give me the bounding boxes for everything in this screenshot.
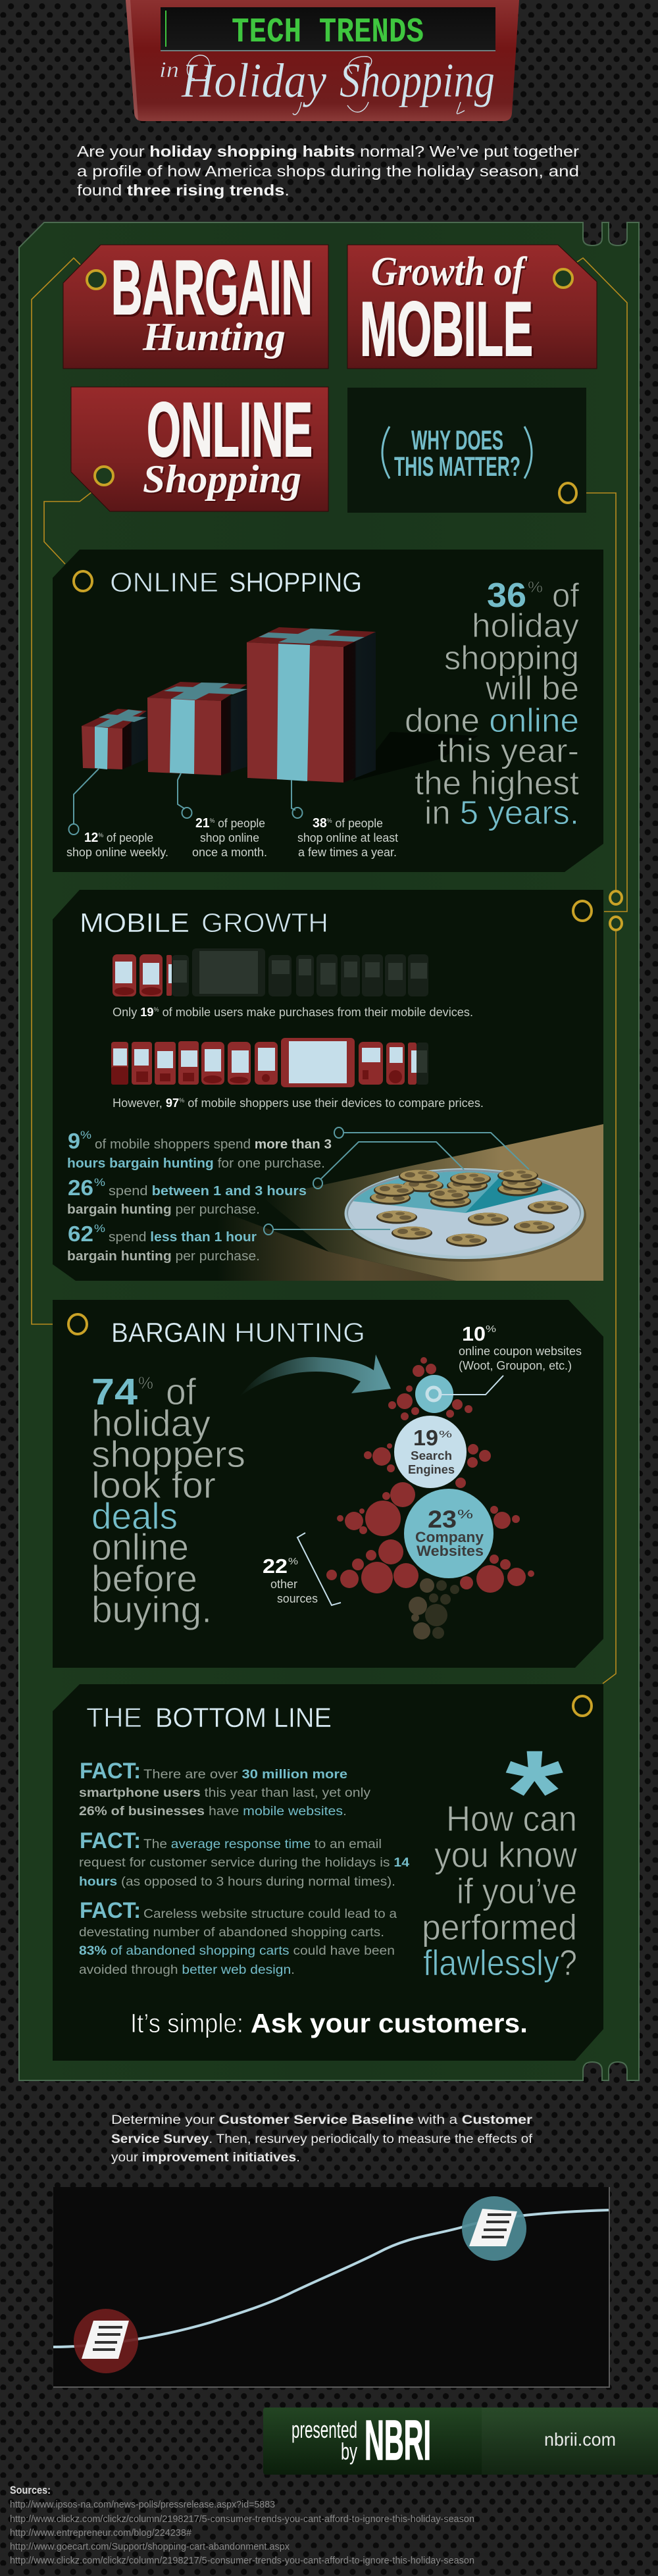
big stat: 74 percent: look for	[91, 1464, 216, 1507]
panel: mobile growth	[53, 890, 603, 1281]
big stat: 36 percent: in 5 years.	[424, 794, 579, 831]
panel: the bottom line	[53, 1684, 603, 2061]
survey paragraph	[111, 2113, 533, 2165]
intro paragraph: found three rising trends .	[77, 182, 290, 199]
presented by banner: nbrii.com	[544, 2429, 616, 2450]
caption: 21 percent: %	[210, 817, 215, 824]
caption: 21 percent	[192, 816, 267, 859]
ring	[68, 1314, 87, 1334]
heading	[111, 1317, 365, 1348]
heading: ONLINE	[110, 567, 218, 598]
icon: baseline survey	[74, 2309, 138, 2373]
closing line: It’s simple:	[130, 2008, 243, 2038]
fact 3	[79, 1898, 397, 1977]
stat: 62 percent: %	[94, 1222, 105, 1235]
fact 3: avoided through better web design .	[79, 1963, 295, 1977]
chart: improvement curve	[53, 2187, 609, 2387]
presented by banner: by	[341, 2438, 357, 2465]
closing line	[130, 2008, 528, 2038]
intro paragraph	[77, 143, 579, 199]
illustration: cookie plate on table	[217, 1124, 603, 1281]
fact 2: FACT:	[80, 1828, 141, 1853]
bubble: 23 percent	[404, 1489, 494, 1578]
fact 2: The average response time to an email	[143, 1838, 382, 1851]
script title: Shopping	[340, 54, 495, 108]
heading: BOTTOM LINE	[155, 1702, 332, 1733]
heading: GROWTH	[201, 908, 328, 938]
fact 3: devestating number of abandoned shopping carts.	[79, 1926, 384, 1940]
question: flawlessly?	[423, 1942, 577, 1983]
label: 22 percent: sources	[277, 1592, 318, 1605]
icon: follow-up survey	[462, 2196, 526, 2261]
caption: 38 percent: of people	[332, 817, 383, 830]
fact 1	[79, 1759, 371, 1818]
caption: 12 percent: %	[98, 832, 103, 838]
label: 22 percent: %	[288, 1556, 298, 1567]
panel: bargain hunting	[53, 1300, 603, 1668]
heading: MOBILE	[80, 908, 190, 938]
label: 10 percent	[459, 1322, 582, 1372]
stat: 9 percent: hours bargain hunting for one purchase.	[67, 1156, 325, 1171]
bubble: 19 percent: Engines	[408, 1463, 455, 1476]
tag: growth of mobile: Growth of	[371, 249, 528, 294]
label: 22 percent: 22	[263, 1555, 288, 1578]
label: 10 percent: 10	[462, 1322, 486, 1345]
bubble: 23 percent: %	[457, 1508, 473, 1521]
heading: HUNTING	[234, 1317, 365, 1348]
stat: 62 percent: bargain hunting per purchase.	[67, 1249, 260, 1264]
big stat: 36 percent: %	[528, 579, 543, 596]
big stat: 36 percent: done online	[405, 702, 579, 739]
heading: THE	[86, 1702, 142, 1733]
fact 2: hours (as opposed to 3 hours during normal times).	[79, 1875, 395, 1889]
label: 22 percent: other	[270, 1578, 297, 1591]
panel: why does this matter: WHY DOES	[411, 425, 503, 455]
panel: online shopping	[53, 550, 603, 872]
big stat: 36 percent: of	[552, 577, 580, 614]
stat: 9 percent: of mobile shoppers spend more than 3	[95, 1137, 332, 1152]
caption: 12 percent: of people	[103, 831, 153, 844]
stat: 26 percent: spend between 1 and 3 hours	[109, 1184, 307, 1198]
heading	[110, 567, 362, 598]
sources: http://www.ipsos-na.com/news-polls/pressrelease.aspx?id=5883	[10, 2499, 275, 2510]
big stat: 36 percent: shopping	[444, 639, 579, 677]
fact 3: Careless website structure could lead to a	[143, 1907, 397, 1921]
tree: trunk	[409, 1578, 459, 1639]
question	[422, 1798, 577, 1983]
stat: 26 percent: 26	[68, 1175, 93, 1200]
caption: 12 percent: 12	[84, 831, 98, 845]
sources: http://www.entrepreneur.com/blog/224238#	[10, 2527, 192, 2538]
panel: why does this matter: THIS MATTER?	[394, 451, 520, 482]
question: How can	[446, 1798, 577, 1839]
bubble: 23 percent: Company	[415, 1529, 484, 1545]
caption: 12 percent	[66, 831, 168, 859]
stat: 9 percent: 9	[68, 1129, 80, 1153]
tree: red ornaments	[326, 1357, 534, 1593]
gift: small	[82, 709, 147, 769]
stat: 62 percent: spend less than 1 hour	[109, 1230, 257, 1245]
stat: 62 percent	[67, 1222, 260, 1264]
arrow	[240, 1354, 391, 1397]
label: 10 percent: %	[486, 1324, 496, 1335]
label: 22 percent	[263, 1533, 341, 1605]
script title: in	[159, 58, 179, 82]
heading: SHOPPING	[229, 567, 362, 598]
caption: 38 percent: a few times a year.	[298, 846, 397, 859]
header banner	[126, 0, 519, 121]
caption: 21 percent: shop online	[200, 831, 259, 844]
tag: online shopping	[71, 386, 328, 511]
fact 2	[79, 1828, 409, 1889]
sources: http://www.clickz.com/clickz/column/2198217/5-consumer-trends-you-cant-afford-to-ignore-this-holiday-season	[10, 2513, 474, 2525]
bubble: 23 percent: 23	[428, 1506, 457, 1533]
floor shadow	[353, 732, 478, 781]
tag: online shopping: ONLINE	[147, 386, 313, 473]
question: you know	[434, 1834, 577, 1875]
big stat: 74 percent: before	[91, 1558, 197, 1600]
connector lines	[68, 769, 303, 835]
big stat: 36 percent: 36	[487, 577, 526, 615]
tag: growth of mobile	[347, 245, 597, 372]
big stat: 36 percent: will be	[485, 669, 579, 707]
big stat: 74 percent: 74	[91, 1371, 138, 1413]
sources	[10, 2484, 474, 2566]
bubble: 19 percent: Search	[411, 1449, 452, 1462]
label: 10 percent: online coupon websites	[459, 1345, 582, 1358]
sources: http://www.clickz.com/clickz/column/2198217/5-consumer-trends-you-cant-afford-to-ignore-this-holiday-season	[10, 2555, 474, 2566]
survey paragraph: Determine your Customer Service Baseline with a Customer	[111, 2113, 533, 2127]
bubble: 19 percent: %	[439, 1429, 452, 1440]
big stat: 74 percent: shoppers	[91, 1433, 245, 1476]
gift: large	[247, 627, 376, 783]
LCD display	[161, 7, 495, 52]
caption: 21 percent: of people	[215, 817, 265, 830]
bubble: 19 percent	[394, 1416, 467, 1488]
caption: 19 percent: of mobile users make purchases from their mobile devices.	[159, 1006, 473, 1019]
big stat: 74 percent	[91, 1371, 245, 1631]
caption: 21 percent: 21	[195, 816, 210, 831]
intro paragraph: Are your holiday shopping habits normal? We’ve put together	[77, 143, 579, 160]
sources: http://www.goecart.com/Support/shopping-cart-abandonment.aspx	[10, 2541, 290, 2552]
survey paragraph: your improvement initiatives .	[111, 2151, 300, 2165]
caption: 19 percent: Only 19	[113, 1006, 153, 1019]
heading	[80, 908, 328, 938]
tag: bargain hunting: Hunting	[142, 315, 286, 359]
presented by banner	[263, 2408, 658, 2475]
big stat: 74 percent: buying.	[91, 1589, 212, 1631]
ring	[74, 571, 92, 591]
script title	[159, 54, 495, 115]
intro paragraph: a profile of how America shops during the holiday season, and	[77, 163, 579, 180]
gold circuit traces	[32, 258, 627, 1684]
tag: growth of mobile: MOBILE	[360, 286, 533, 372]
circuit board background	[19, 222, 639, 2080]
closing line: Ask your customers.	[251, 2008, 528, 2038]
presented by banner: presented	[291, 2416, 357, 2443]
presented by banner: NBRI	[365, 2409, 431, 2472]
caption: 97 percent: of mobile shoppers use their devices to compare prices.	[184, 1096, 484, 1110]
survey paragraph: Service Survey . Then, resurvey periodically to measure the effects of	[111, 2132, 533, 2146]
fact 3: FACT:	[80, 1898, 141, 1923]
stat: 26 percent: bargain hunting per purchase.	[67, 1202, 260, 1217]
fact 1: smartphone users this year than last, yet only	[79, 1786, 371, 1800]
fact 1: FACT:	[80, 1759, 141, 1784]
stat: 26 percent: %	[94, 1176, 105, 1189]
stat: 9 percent: %	[80, 1129, 91, 1141]
big stat: 74 percent: deals	[91, 1495, 178, 1537]
tag: bargain hunting: BARGAIN	[111, 244, 313, 330]
ring	[573, 901, 592, 921]
asterisk: *	[505, 1725, 563, 1859]
big stat: 74 percent: of	[166, 1371, 196, 1413]
caption: 38 percent	[297, 816, 398, 859]
heading: BARGAIN	[111, 1317, 226, 1348]
big stat: 36 percent: this year-	[438, 732, 579, 769]
big stat: 74 percent: %	[138, 1373, 153, 1393]
label: 10 percent: (Woot, Groupon, etc.)	[459, 1359, 572, 1372]
LCD display: TECH TRENDS	[232, 13, 424, 52]
callout leader lines	[264, 1127, 529, 1235]
fact 1: There are over 30 million more	[143, 1768, 347, 1782]
big stat: 36 percent	[405, 577, 580, 831]
big stat: 36 percent: the highest	[415, 764, 579, 802]
bubble: 10 percent	[415, 1375, 503, 1413]
stat: 62 percent: 62	[68, 1222, 93, 1246]
question: if you’ve	[457, 1870, 577, 1911]
big stat: 74 percent: holiday	[91, 1403, 211, 1445]
stat: 9 percent	[67, 1129, 332, 1171]
caption: 38 percent: 38	[313, 816, 327, 831]
phones row 2: 97 percent	[111, 1038, 428, 1087]
caption: 21 percent: once a month.	[192, 846, 267, 859]
bubble: 23 percent: Websites	[417, 1543, 484, 1559]
panel: why does this matter	[347, 388, 586, 513]
caption: 38 percent: %	[327, 817, 332, 824]
fact 1: 26% of businesses have mobile websites .	[79, 1805, 347, 1818]
question: performed	[422, 1907, 577, 1947]
caption: 97 percent: %	[179, 1097, 184, 1104]
caption: 12 percent: shop online weekly.	[66, 846, 168, 859]
fact 2: request for customer service during the holidays is 14	[79, 1856, 409, 1870]
caption: 19 percent: %	[153, 1006, 159, 1013]
tag: online shopping: Shopping	[143, 457, 301, 501]
big stat: 74 percent: online	[91, 1526, 189, 1568]
ring	[573, 1696, 592, 1716]
phones row 1: 19 percent	[113, 948, 428, 996]
script title: Holiday	[181, 54, 326, 108]
bubble: 19 percent: 19	[413, 1426, 438, 1450]
stat: 26 percent	[67, 1175, 307, 1217]
heading	[86, 1702, 332, 1733]
gift: medium	[147, 682, 247, 775]
caption: 97 percent: However, 97	[113, 1096, 179, 1110]
caption: 38 percent: shop online at least	[297, 831, 398, 844]
tag: bargain hunting	[63, 244, 328, 369]
big stat: 36 percent: holiday	[472, 607, 579, 644]
sources: Sources:	[10, 2484, 51, 2496]
fact 3: 83% of abandoned shopping carts could have been	[79, 1944, 395, 1958]
